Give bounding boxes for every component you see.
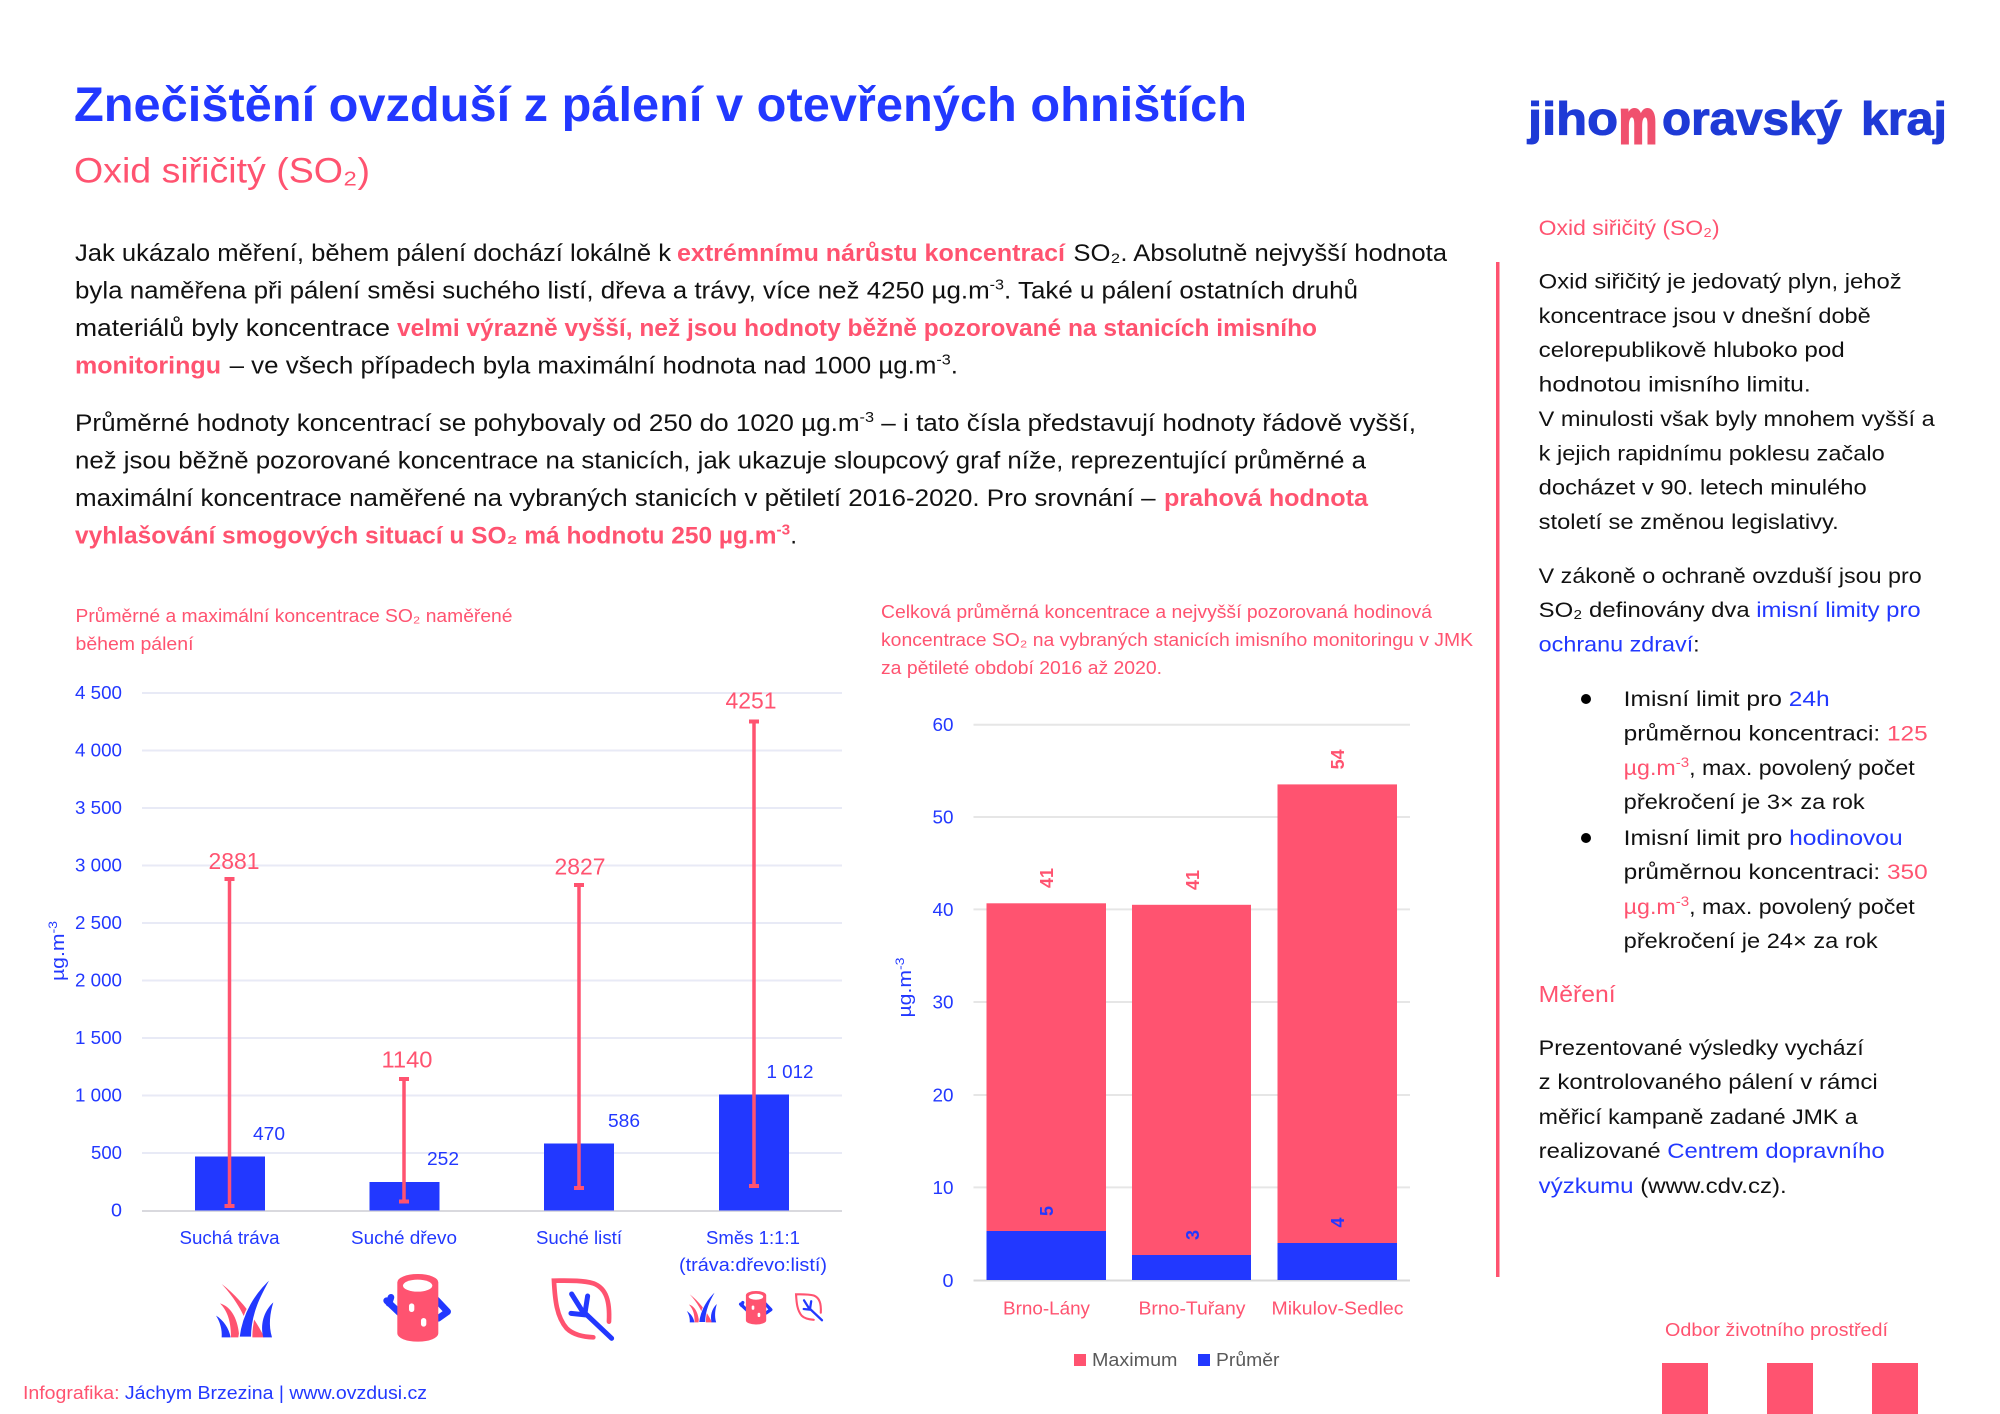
y axis labels: 4 500 [75, 683, 122, 703]
footer credit: Infografika: Jáchym Brzezina | www.ovzdusi.cz [23, 1383, 427, 1403]
sidebar heading: measurement: Měření [1539, 981, 1616, 1007]
category labels: Mikulov-Sedlec [1272, 1298, 1404, 1318]
text block: intro paragraph 1: -3 [936, 352, 951, 369]
bars: maximum [986, 784, 1397, 1256]
text block: intro paragraph 1: monitoringu [75, 353, 221, 380]
text block: intro paragraph 2: – i tato čísla představují hodnoty řádově vyšší, [874, 410, 1416, 437]
category labels: Suchá tráva [180, 1228, 281, 1248]
chart heading: Průměrné a maximální koncentrace SO₂ naměřené [76, 606, 512, 626]
title: Znečištění ovzduší z pálení v otevřených ohništích [74, 79, 1247, 132]
sidebar text: measurement: měřicí kampaně zadané JMK a [1539, 1105, 1858, 1129]
sidebar text: description [1539, 269, 1935, 534]
maximum value labels: 4251 [726, 688, 776, 714]
average value labels: 252 [427, 1149, 459, 1169]
sidebar text: description: k jejich rapidnímu poklesu začalo [1539, 442, 1885, 466]
average value labels: 470 [253, 1124, 285, 1144]
text block: intro paragraph 2: Průměrné hodnoty koncentrací se pohybovaly od 250 do 1020 µg.m [75, 410, 797, 437]
category labels: Suché dřevo [351, 1228, 457, 1248]
bullet list: limit values: µg.m [1624, 895, 1676, 919]
icon: leaf [554, 1281, 612, 1338]
panel: chart of burning concentrations [46, 606, 842, 1342]
y axis unit: µg.m [895, 977, 915, 1018]
legend: Maximum [1092, 1350, 1178, 1370]
y axis labels: 500 [91, 1143, 122, 1163]
logo: jihomoravský kraj [1527, 88, 1947, 157]
text block: intro paragraph 1: . Také u pálení ostatních druhů [1004, 278, 1358, 305]
maximum value labels: 41 [1183, 870, 1203, 890]
bullet list: limit values: µg.m [1624, 756, 1676, 780]
y axis unit: -3 [893, 957, 907, 970]
text block: intro paragraph 1: SO₂. Absolutně nejvyšší hodnota [1073, 240, 1448, 267]
bullet list: limit values: , max. povolený počet [1689, 895, 1915, 919]
sidebar text: description: koncentrace jsou v dnešní době [1539, 304, 1871, 328]
y axis labels: 1 000 [75, 1086, 122, 1106]
bullet list: limit values [1581, 687, 1928, 953]
bullet list: limit values: průměrnou koncentraci: 125 [1624, 721, 1928, 745]
sidebar text: description: hodnotou imisního limitu. [1539, 372, 1811, 396]
text block: intro paragraph 2: maximální koncentrace naměřené na vybraných stanicích v pětiletí 2016-2020. Pro srovnání – [75, 485, 1156, 512]
y axis unit: -3 [46, 921, 60, 934]
y axis labels: 20 [932, 1086, 954, 1106]
bullet list: limit values: Imisní limit pro hodinovou [1624, 826, 1903, 850]
category labels [180, 1228, 827, 1275]
subtitle: Oxid siřičitý (SO₂) [74, 152, 370, 190]
text block: intro paragraph 2: . [790, 522, 797, 549]
text block: intro paragraph 1: materiálů byly koncentrace [75, 315, 390, 342]
text block: intro paragraph 1: extrémnímu nárůstu koncentrací [677, 240, 1066, 267]
sidebar text: limits intro: ochranu zdraví : [1539, 633, 1700, 657]
text block: intro paragraph 2: -3 [860, 409, 874, 426]
average value labels: 5 [1037, 1206, 1057, 1216]
average value labels [1037, 1206, 1348, 1240]
sidebar text: measurement [1539, 1036, 1885, 1198]
y axis labels [932, 715, 954, 1291]
y axis labels: 3 000 [75, 856, 122, 876]
y axis labels: 2 500 [75, 913, 122, 933]
maximum value labels [208, 688, 776, 1072]
sidebar text: limits intro: SO₂ definovány dva imisní limity pro [1539, 598, 1921, 622]
maximum value labels [1037, 749, 1348, 890]
maximum value labels: 2881 [208, 848, 260, 874]
maximum value labels: 1140 [382, 1046, 432, 1072]
text block: intro paragraph 1: byla naměřena při pálení směsi suchého listí, dřeva a trávy, více než 4250 µg.m [75, 278, 922, 305]
text block: intro paragraph 1: Jak ukázalo měření, během pálení dochází lokálně k [75, 240, 672, 267]
logo: jihomoravský kraj: m [1619, 88, 1657, 157]
sidebar text: description: století se změnou legislativy. [1539, 510, 1839, 534]
y axis labels: 10 [932, 1178, 954, 1198]
maximum value labels: 2827 [554, 854, 606, 880]
legend [1074, 1350, 1280, 1370]
chart heading: během pálení [76, 634, 194, 654]
sidebar text: description: V minulosti však byly mnohem vyšší a [1539, 407, 1935, 431]
logo: jihomoravský kraj: oravský [1662, 92, 1842, 144]
maximum value labels: 54 [1328, 749, 1348, 769]
text block: intro paragraph 2: -3 [777, 521, 790, 538]
text block: intro paragraph 1: -3 [990, 277, 1004, 294]
legend: Průměr [1216, 1350, 1280, 1370]
y axis labels: 40 [932, 900, 954, 920]
sidebar text: description: docházet v 90. letech minulého [1539, 476, 1867, 500]
sidebar text: measurement: z kontrolovaného pálení v rámci [1539, 1070, 1878, 1094]
maximum value labels: 41 [1037, 868, 1057, 888]
chart heading [76, 606, 512, 654]
bullet list: limit values: -3 [1676, 893, 1689, 909]
y axis labels: 0 [111, 1200, 122, 1220]
bullet list: limit values: překročení je 24× za rok [1624, 929, 1878, 953]
chart heading: koncentrace SO₂ na vybraných stanicích imisního monitoringu v JMK [881, 630, 1473, 650]
sidebar text: measurement: výzkumu (www.cdv.cz). [1539, 1174, 1787, 1198]
average value labels: 3 [1183, 1230, 1203, 1240]
category labels: Brno-Lány [1003, 1298, 1090, 1318]
department label: Odbor životního prostředí [1665, 1320, 1888, 1340]
bullet list: limit values: překročení je 3× za rok [1624, 790, 1865, 814]
bars: average [195, 1094, 789, 1210]
sidebar text: description: Oxid siřičitý je jedovatý plyn, jehož [1539, 269, 1902, 293]
bullet list: limit values: -3 [1676, 754, 1689, 770]
logo: jihomoravský kraj: kraj [1861, 92, 1947, 144]
text block: intro paragraph 1: velmi výrazně vyšší, než jsou hodnoty běžně pozorované na stanicích imisního [397, 315, 1317, 342]
average value labels: 4 [1328, 1217, 1348, 1228]
chart heading [881, 602, 1473, 678]
sidebar heading: Oxid siřičitý (SO₂) [1539, 216, 1720, 240]
category labels [1003, 1298, 1404, 1318]
y axis unit: µg.m [48, 941, 68, 981]
y axis labels: 3 500 [75, 798, 122, 818]
sidebar text: limits intro: V zákoně o ochraně ovzduší jsou pro [1539, 564, 1922, 588]
y axis labels: 0 [942, 1271, 954, 1291]
text block: intro paragraph 2: prahová hodnota [1164, 485, 1369, 512]
sidebar text: description: celorepublikově hluboko pod [1539, 338, 1845, 362]
sidebar text: measurement: realizované Centrem dopravního [1539, 1139, 1885, 1163]
text block: intro paragraph 1 [75, 240, 1448, 380]
y axis labels: 2 000 [75, 970, 122, 990]
panel: sidebar [1539, 216, 1935, 1198]
icon group: mixture [687, 1291, 822, 1324]
bullet list: limit values: průměrnou koncentraci: 350 [1624, 860, 1928, 884]
y axis labels [75, 683, 122, 1220]
text block: intro paragraph 2: vyhlašování smogových situací u SO₂ má hodnotu 250 µg.m [75, 522, 777, 549]
text block: intro paragraph 1: – ve všech případech byla maximální hodnota nad 1000 µg.m [230, 353, 885, 380]
category labels: Brno-Tuřany [1138, 1298, 1246, 1318]
average value labels: 1 012 [766, 1062, 814, 1082]
panel: chart of monitoring stations [881, 602, 1473, 1370]
error bars: maximum [224, 722, 759, 1206]
icon: log [387, 1274, 448, 1342]
text block: intro paragraph 2 [75, 409, 1416, 549]
text block: intro paragraph 2: než jsou běžně pozorované koncentrace na stanicích, jak ukazuje sloupcový graf níže, reprezentující průměrné a [75, 447, 1367, 474]
category labels: Směs 1:1:1 [706, 1228, 800, 1248]
sidebar text: measurement: Prezentované výsledky vychází [1539, 1036, 1864, 1060]
y axis labels: 50 [932, 808, 954, 828]
category labels: (tráva:dřevo:listí) [679, 1255, 827, 1275]
y axis labels: 30 [932, 992, 954, 1012]
icon: grass [216, 1277, 273, 1337]
sidebar text: limits intro [1539, 564, 1922, 657]
category labels: Suché listí [536, 1228, 622, 1248]
average value labels: 586 [608, 1111, 640, 1131]
logo: jihomoravský kraj: jiho [1527, 92, 1618, 144]
decorative squares [1662, 1363, 1918, 1414]
y axis labels: 4 000 [75, 740, 122, 760]
bars: average [986, 1231, 1397, 1280]
text block: intro paragraph 1: . [951, 353, 958, 380]
chart heading: Celková průměrná koncentrace a nejvyšší pozorovaná hodinová [881, 602, 1433, 622]
average value labels [253, 1062, 814, 1169]
bullet list: limit values: Imisní limit pro 24h [1624, 687, 1830, 711]
y axis labels: 60 [932, 715, 954, 735]
bullet list: limit values: , max. povolený počet [1689, 756, 1915, 780]
y axis labels: 1 500 [75, 1028, 122, 1048]
chart heading: za pětileté období 2016 až 2020. [881, 658, 1162, 678]
